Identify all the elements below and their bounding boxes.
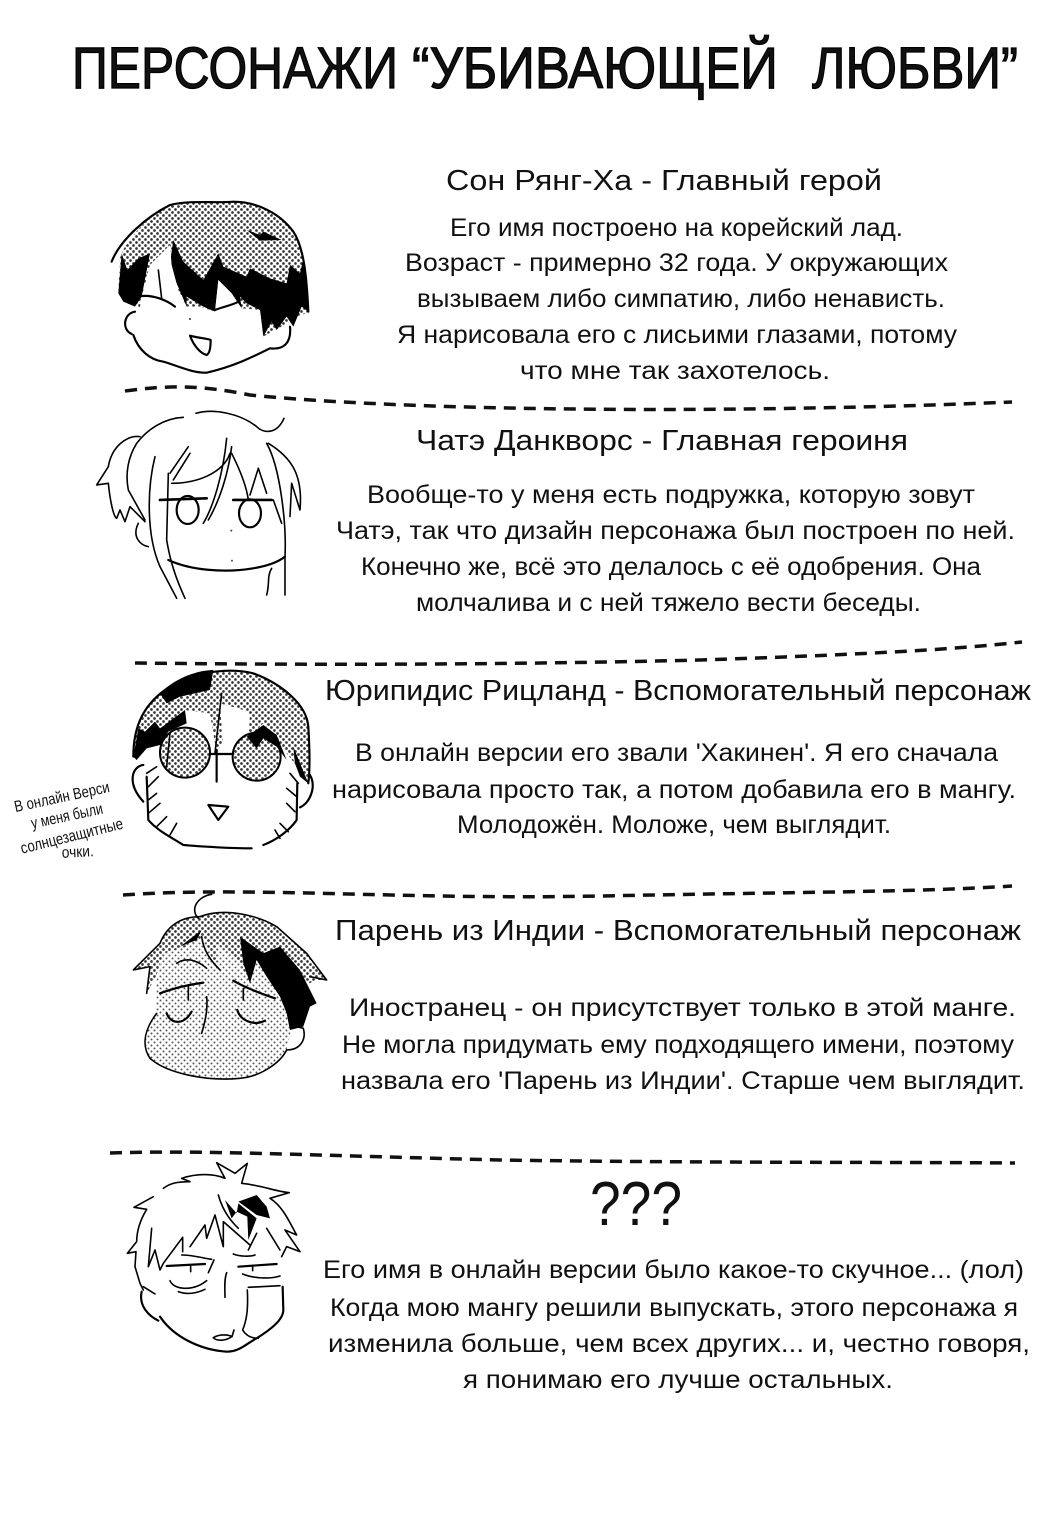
text block (397, 214, 958, 385)
title: ПЕРСОНАЖИ (72, 36, 398, 101)
icon: face of Парень из Индии (133, 894, 327, 1079)
text block: назвала его 'Парень из Индии'. Старше чем выглядит. (341, 1067, 1025, 1095)
callout: side note: у меня были (30, 801, 105, 833)
text block: я понимаю его лучше остальных. (463, 1366, 893, 1394)
text block: вызываем либо симпатию, либо ненависть. (417, 285, 945, 313)
heading: ??? (590, 1170, 682, 1239)
text block: что мне так захотелось. (520, 357, 830, 385)
text block: Чатэ, так что дизайн персонажа был построен по ней. (336, 517, 1015, 545)
icon: face of Сон Рянг-Ха (112, 202, 308, 373)
panel: Чатэ Данкворс (97, 411, 1015, 617)
title: “УБИВАЮЩЕЙ (412, 36, 778, 101)
text block: нарисовала просто так, а потом добавила его в мангу. (332, 776, 1016, 804)
panel: ??? (127, 1163, 1030, 1394)
text block: Его имя построено на корейский лад. (450, 214, 903, 242)
title: ЛЮБВИ” (812, 36, 1018, 101)
text block: Его имя в онлайн версии было какое-то скучное... (лол) (323, 1256, 1024, 1284)
text block: изменила больше, чем всех других... и, честно говоря, (328, 1330, 1030, 1358)
icon: face of mystery character (127, 1163, 300, 1352)
panel: Юрипидис Рицланд (13, 670, 1032, 862)
text block: молчалива и с ней тяжело вести беседы. (416, 589, 921, 617)
heading: Сон Рянг-Ха - Главный герой (446, 165, 882, 197)
heading: Юрипидис Рицланд - Вспомогательный персонаж (325, 675, 1032, 707)
text block (323, 1256, 1030, 1394)
text block: Вообще-то у меня есть подружка, которую зовут (367, 481, 976, 509)
text block: Возраст - примерно 32 года. У окружающих (405, 249, 949, 277)
text block: Молодожён. Моложе, чем выглядит. (457, 811, 891, 839)
callout: side note: солнцезащитные (19, 816, 125, 858)
panel: Сон Рянг-Ха (112, 165, 958, 385)
text block: Когда мою мангу решили выпускать, этого персонажа я (330, 1294, 1018, 1322)
heading: Парень из Индии - Вспомогательный персонаж (335, 915, 1022, 947)
panel: Парень из Индии (133, 894, 1025, 1095)
text block (336, 481, 1015, 617)
callout: side note (13, 779, 125, 862)
text block: Конечно же, всё это делалось с её одобрения. Она (361, 553, 981, 581)
text block: В онлайн версии его звали 'Хакинен'. Я его сначала (355, 739, 998, 767)
text block: Я нарисовала его с лисьими глазами, потому (397, 321, 958, 349)
callout: side note: очки. (61, 843, 94, 862)
text block: Иностранец - он присутствует только в этой манге. (349, 994, 1016, 1022)
text block (332, 739, 1016, 839)
text block (341, 994, 1025, 1095)
text block: Не могла придумать ему подходящего имени, поэтому (342, 1031, 1015, 1059)
icon: face of Юрипидис Рицланд (133, 670, 313, 848)
heading: Чатэ Данкворс - Главная героиня (416, 425, 908, 457)
title (72, 36, 1018, 101)
icon: face of Чатэ Данкворс (97, 411, 300, 598)
callout: side note: В онлайн Верси (13, 779, 111, 816)
